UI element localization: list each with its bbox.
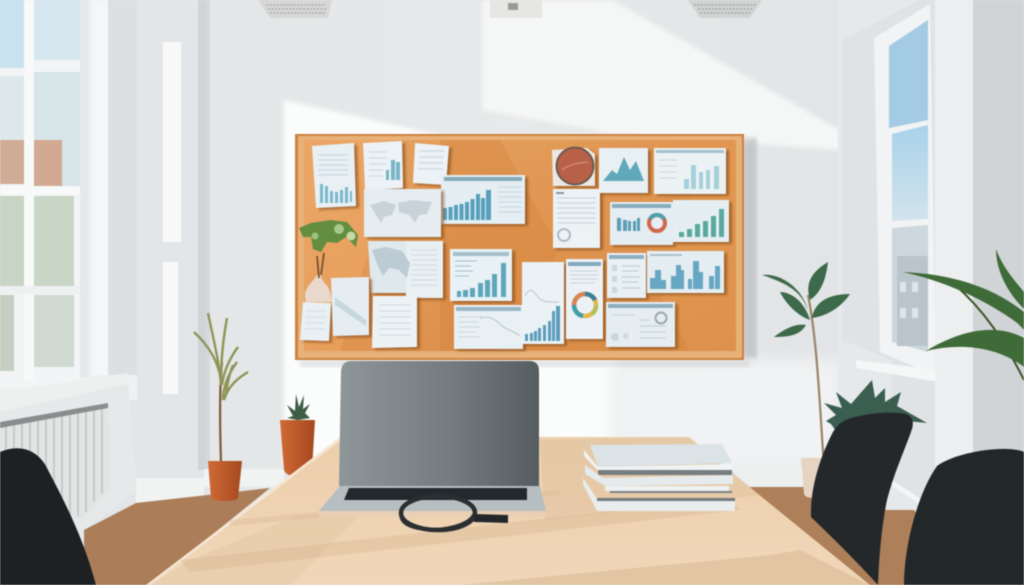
chart: wide bars	[441, 175, 525, 224]
cork board	[295, 134, 757, 367]
ceiling vents	[258, 0, 762, 18]
note: small chart	[363, 141, 403, 190]
report sheet with ring	[553, 189, 600, 248]
laptop lid	[339, 361, 539, 486]
plant: fern behind chair	[824, 380, 927, 440]
magnifying glass	[401, 496, 508, 530]
note: top left with bars	[312, 143, 356, 208]
chart: rising bars	[450, 249, 512, 301]
sheet: world map	[364, 189, 441, 237]
floor	[84, 466, 922, 585]
right pillar	[925, 0, 1024, 585]
note: text sheet	[413, 143, 449, 185]
keyboard	[344, 488, 527, 500]
plant: right floor tree	[762, 262, 850, 498]
sheet: folded map	[368, 241, 443, 298]
left window wall and pillar	[0, 0, 206, 505]
report: line chart	[454, 305, 523, 349]
chair: right	[904, 449, 1024, 585]
card: bars and donut	[610, 202, 673, 245]
window sill and radiator	[0, 373, 136, 585]
sheet: icon list	[607, 253, 646, 298]
report: donut	[566, 259, 603, 339]
pinned sheets lower left	[300, 277, 417, 348]
paper with round clock object	[552, 146, 595, 186]
laptop	[319, 361, 546, 517]
laptop base	[319, 486, 546, 511]
card: teal mountains	[599, 148, 648, 193]
plant: right large leaves	[902, 249, 1024, 380]
plant: small succulent	[280, 394, 315, 477]
pot: left	[208, 461, 242, 501]
left window	[0, 0, 90, 388]
stack of papers	[583, 444, 735, 511]
sheet: gauge summary	[606, 302, 675, 347]
card: pale bars	[654, 148, 726, 194]
report: tall bars	[522, 262, 564, 344]
card: green bars	[673, 200, 729, 242]
plant: left tall grass	[194, 313, 248, 462]
chair: centre right	[811, 413, 913, 585]
chair: left	[0, 448, 96, 585]
right window recess	[838, 0, 938, 516]
chart: grouped bars	[647, 251, 724, 293]
vase with small plant	[299, 220, 358, 302]
desk	[146, 437, 870, 585]
